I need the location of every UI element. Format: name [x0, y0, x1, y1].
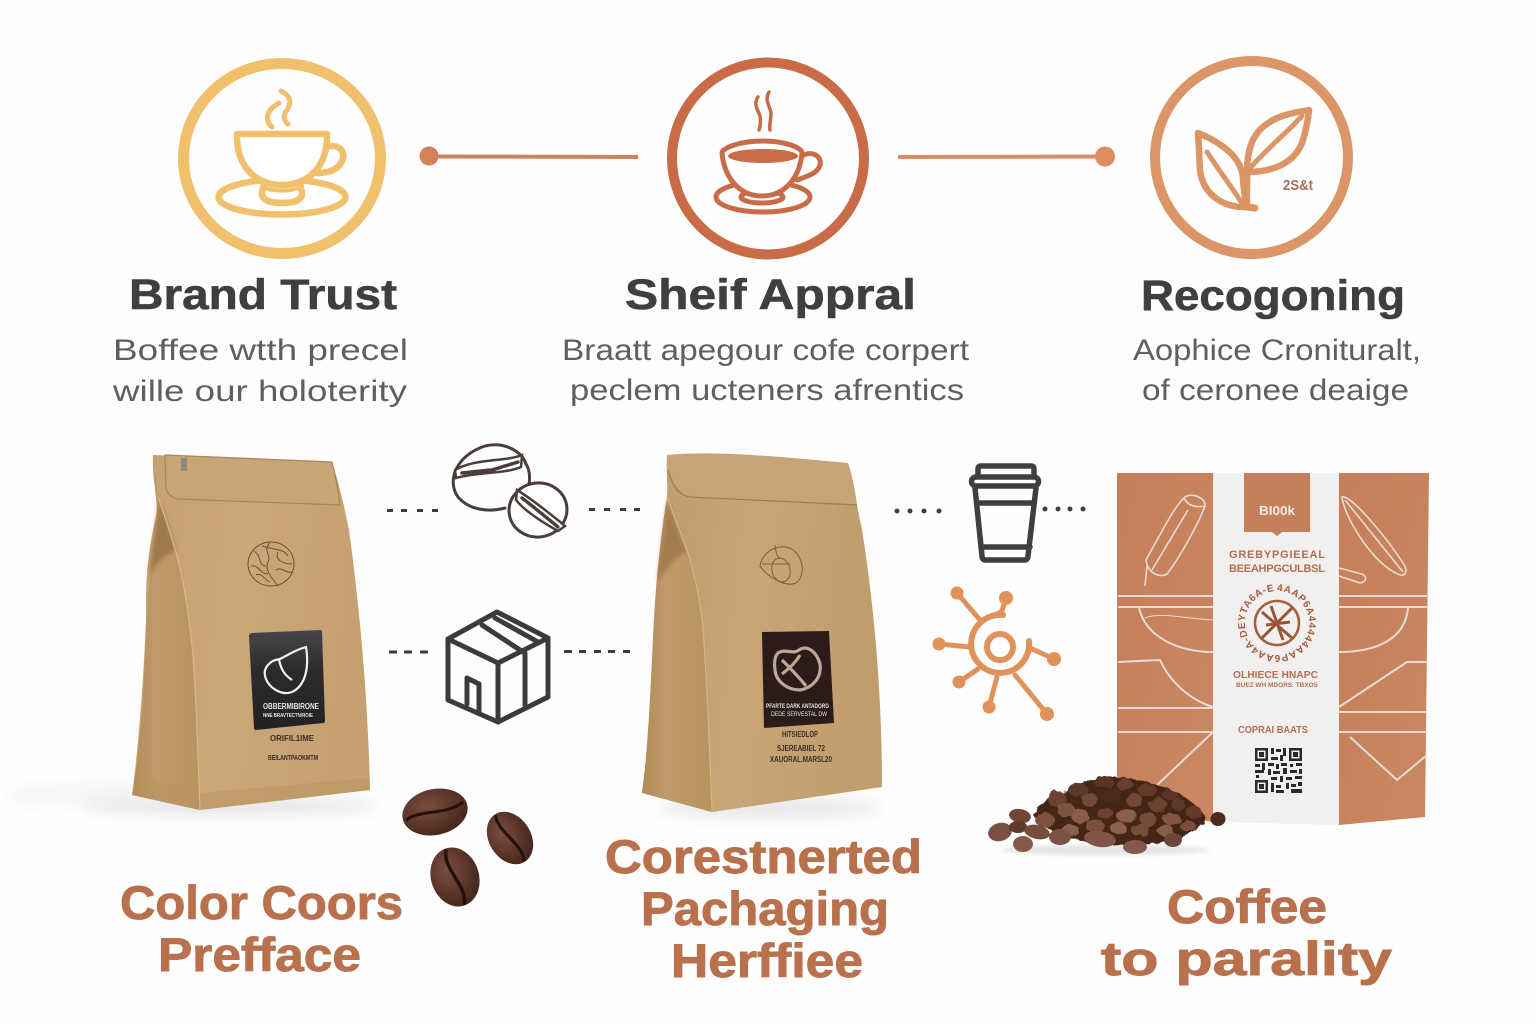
panel: recognition: [1133, 61, 1421, 407]
panel: printed pouch: [1117, 473, 1429, 825]
side print: [181, 458, 187, 471]
caption: Color Coors Prefface: Prefface: [158, 928, 361, 981]
caption: Coffee to parality: [1101, 880, 1392, 985]
caption: Color Coors Prefface: Color Coors: [120, 876, 403, 929]
seal: [1238, 584, 1316, 662]
caption: Coffee to parality: Coffee: [1167, 880, 1327, 933]
bag body: [642, 453, 882, 812]
pouch headline: [1229, 549, 1325, 575]
dashes: bean connectors: [387, 508, 640, 512]
text: shelf appeal description: peclem ucteners afrentics: [570, 374, 964, 407]
bean top: [398, 783, 472, 841]
icon: takeaway cup: [972, 466, 1038, 560]
pouch subtext: COPRAI BAATS: [1238, 725, 1308, 736]
bag body: [132, 455, 370, 810]
text: shelf appeal description: Braatt apegour cofe corpert: [562, 334, 970, 367]
panel: left kraft bag: [10, 455, 380, 813]
pouch line art: [1118, 495, 1427, 787]
panel: middle kraft bag: [642, 453, 885, 815]
text: recognition description: [1133, 334, 1421, 407]
pouch headline: BEEAHPGCULBSL: [1229, 563, 1325, 575]
icon: box with door: [448, 612, 548, 722]
icon: filled cup in terracotta circle: [672, 62, 864, 254]
connector: right line dot: [898, 146, 1115, 166]
icon: orange network: [932, 586, 1061, 721]
caption: Corestnerted Pachaging Herffiee: [605, 830, 922, 987]
icon: cup on saucer in yellow circle: [184, 64, 380, 254]
text: recognition description: of ceronee deaige: [1142, 374, 1409, 407]
text: brand trust description: Boffee wtth precel: [113, 334, 408, 367]
text: recognition description: Aophice Cronituralt,: [1133, 334, 1421, 367]
QR code: [1255, 748, 1302, 793]
panel: brand trust: [112, 64, 408, 408]
text: brand trust description: wille our holoterity: [112, 375, 407, 408]
icon: leaves in peach circle: [1155, 61, 1348, 254]
pouch subtext: OLHIECE HNAPC: [1233, 669, 1318, 681]
panel: shelf appeal: [562, 62, 970, 407]
loose coffee beans: [398, 783, 543, 913]
black label: OBBERMIBIRONE: [263, 702, 320, 711]
icon: two coffee beans outline: [453, 445, 570, 541]
heading: Recogoning: Recogoning: [1141, 272, 1405, 320]
dark label: [762, 631, 834, 728]
heading: Sheif Appral: Sheif Appral: [625, 271, 916, 319]
pouch body: [1117, 473, 1429, 825]
dark label: PFARTE DARK ANTADORG: [766, 703, 829, 710]
coffee bean pile: [986, 776, 1226, 855]
dashes: box connectors: [389, 650, 630, 654]
caption: Corestnerted Pachaging Herffiee: Corestnerted: [605, 830, 922, 883]
pouch subtext: [1233, 669, 1319, 736]
bean right: [477, 803, 543, 873]
seal: 4AAP6A44444AAP6AA4A-DEYTA6A-E593-44A: [1238, 584, 1316, 662]
pouch headline: GREBYPGIEEAL: [1229, 549, 1325, 561]
bag small print: [268, 733, 318, 762]
bag small print: XAUORAL.MARSL20: [770, 755, 832, 764]
dots: cup connectors: [894, 506, 1086, 514]
dark label: DEDE SERVESTAL DW: [771, 712, 827, 718]
bag small print: BEILANTPAOKMTM: [268, 755, 318, 762]
text: brand trust description: [112, 334, 408, 408]
bag small print: HITSIEDLOP: [782, 730, 818, 739]
caption: Color Coors Prefface: [120, 876, 403, 981]
heading: Brand Trust: Brand Trust: [129, 271, 397, 319]
badge text: BI00k: [1259, 504, 1295, 518]
bean bottom: [423, 841, 487, 913]
connector: left dot line: [420, 146, 638, 166]
caption: Coffee to parality: to parality: [1101, 932, 1392, 985]
icon label: 25&t: 2S&t: [1283, 177, 1313, 194]
bag small print: [770, 730, 832, 764]
black label: [249, 630, 325, 730]
black label: NNE BRAVTECTN/ROIE: [263, 713, 314, 719]
caption: Corestnerted Pachaging Herffiee: Herffiee: [671, 934, 863, 987]
logo: abstract bean: [760, 545, 802, 584]
caption: Corestnerted Pachaging Herffiee: Pachaging: [641, 882, 889, 935]
text: shelf appeal description: [562, 334, 970, 407]
bag small print: ORIFIL1IME: [270, 733, 314, 743]
pouch subtext: BUEZ WH MDORS. TBXOS: [1236, 682, 1319, 689]
bag small print: SJEREABIEL 72: [777, 744, 825, 753]
logo: walnut: [248, 542, 294, 586]
